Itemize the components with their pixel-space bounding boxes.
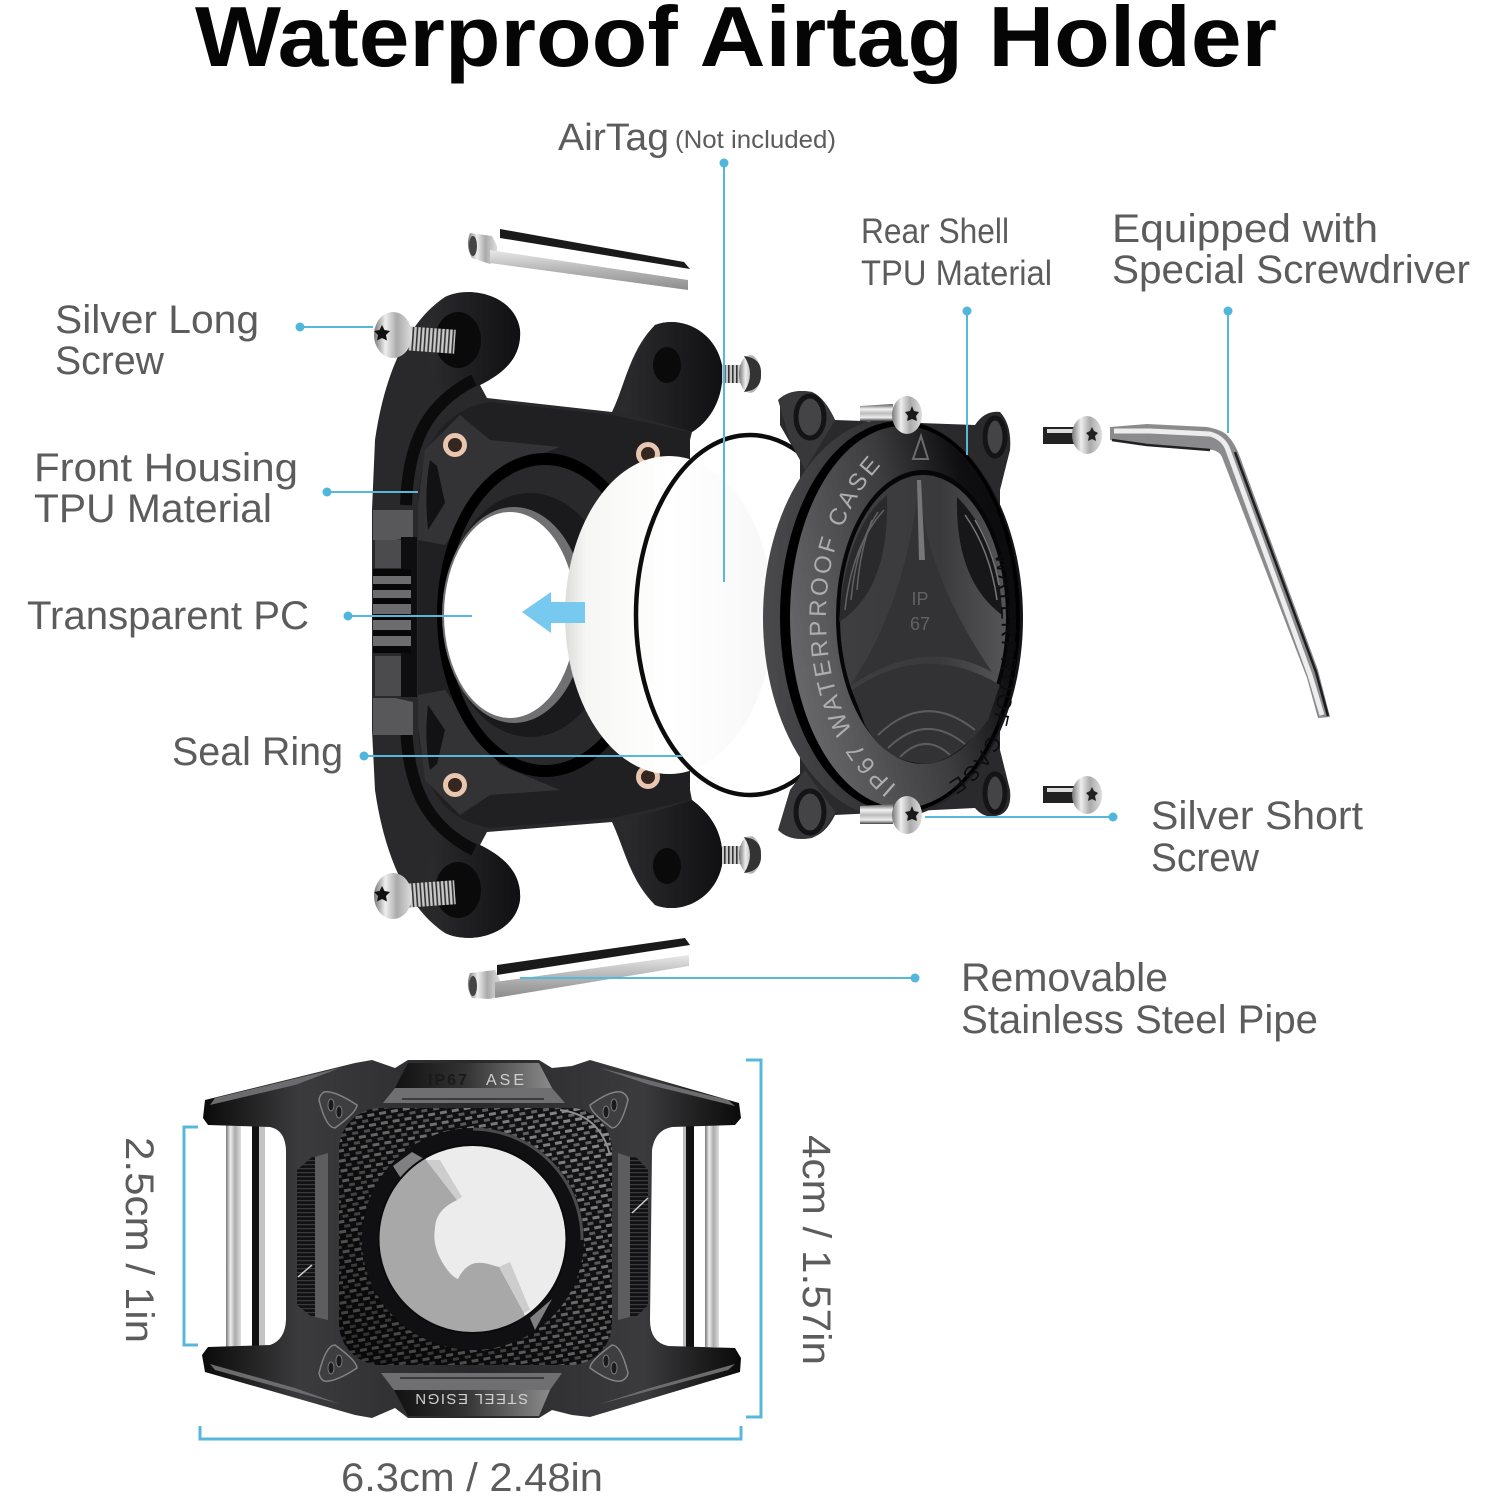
exploded view illustration <box>372 229 1330 999</box>
callout: airtag <box>720 158 728 582</box>
dimension: width <box>200 1426 741 1497</box>
dimension: height <box>746 1060 838 1417</box>
black gutter <box>406 380 474 850</box>
label: rear shell: TPU Material <box>861 254 1052 293</box>
label: seal ring: Seal Ring <box>172 730 343 774</box>
airtag window ring <box>362 1128 584 1350</box>
side vents <box>297 1153 648 1320</box>
callout: rear shell <box>962 306 972 455</box>
label: airtag <box>558 117 836 159</box>
label: front housing: TPU Material <box>34 487 272 531</box>
copper screw holes <box>443 433 660 797</box>
left screws <box>374 312 456 919</box>
inner cap <box>836 470 1010 764</box>
top right lobe <box>620 322 722 432</box>
corner buttons <box>319 1092 628 1381</box>
ip67 mark: 67 <box>910 614 930 634</box>
ip67 mark: IP <box>911 589 929 609</box>
callout: screwdriver <box>1224 306 1232 433</box>
engraved text: IP67 WATERPROOF CASE <box>809 456 896 797</box>
label: front housing <box>34 446 298 531</box>
label: airtag: (Not included) <box>675 126 836 154</box>
screwdriver <box>1110 424 1330 718</box>
airtag with apple logo <box>380 1146 566 1332</box>
bottom tab: STEEL ESIGN <box>414 1390 528 1407</box>
bottom steel pipe <box>468 938 690 999</box>
lens opening <box>437 453 653 777</box>
side grip <box>373 510 413 540</box>
label: stainless steel pipe: Removable <box>961 956 1168 1000</box>
bottom tab <box>381 1373 562 1416</box>
inner plate <box>418 402 690 828</box>
ip67 mark <box>910 589 930 634</box>
steel pins <box>226 1125 719 1347</box>
top tab <box>383 1063 565 1103</box>
ridged sectors <box>839 495 887 622</box>
front housing <box>372 292 722 938</box>
label: airtag: AirTag <box>558 117 669 159</box>
rear shell <box>763 391 1023 839</box>
label: silver long screw: Silver Long <box>55 298 259 342</box>
right housing screws <box>722 355 761 874</box>
top steel pipe <box>468 229 690 290</box>
dimension: height: 4cm / 1.57in <box>794 1135 838 1365</box>
label: front housing: Front Housing <box>34 446 298 490</box>
seal ring <box>636 435 864 795</box>
callout: transparent pc <box>344 612 472 620</box>
centre tri-star <box>850 478 992 686</box>
engraved text: right side: WATERPROOF CASE <box>949 557 1016 794</box>
callout: front housing <box>322 488 418 496</box>
callout: long screw <box>296 322 373 332</box>
lobe holes <box>435 312 481 368</box>
callout: seal ring <box>360 752 682 760</box>
label: silver short screw: Screw <box>1151 836 1259 880</box>
top tab: IP67 <box>428 1072 469 1089</box>
dimension: pin width <box>117 1127 198 1345</box>
arm highlights <box>210 1068 735 1404</box>
callout: short screw <box>925 812 1118 822</box>
top tab: ASE <box>486 1072 527 1089</box>
shell ears <box>780 391 1010 839</box>
label: stainless steel pipe <box>961 956 1318 1042</box>
ear bosses <box>796 396 1005 833</box>
airtag dome <box>565 456 773 774</box>
callout: steel pipe <box>520 974 920 982</box>
spare short screws <box>1043 416 1102 814</box>
bottom right lobe <box>620 800 722 908</box>
label: screwdriver <box>1112 207 1470 292</box>
top left lobe <box>425 292 520 400</box>
carbon fibre panel <box>339 1108 612 1365</box>
label: silver short screw: Silver Short <box>1151 794 1363 838</box>
label: rear shell <box>861 212 1052 293</box>
bottom left lobe <box>425 830 520 938</box>
label: silver short screw <box>1151 794 1363 880</box>
alignment triangle <box>913 436 928 459</box>
label: stainless steel pipe: Stainless Steel Pipe <box>961 998 1318 1042</box>
arrow: insertion direction <box>522 592 585 633</box>
rear shell screws <box>860 396 922 834</box>
dimension: pin width: 2.5cm / 1in <box>117 1137 161 1343</box>
callout lines <box>296 158 1232 982</box>
label: silver long screw: Screw <box>55 339 164 383</box>
label: transparent pc: Transparent PC <box>27 594 309 638</box>
assembled holder illustration <box>202 1060 741 1418</box>
holder body <box>202 1060 741 1418</box>
label: rear shell: Rear Shell <box>861 212 1009 251</box>
label: screwdriver: Special Screwdriver <box>1112 248 1470 292</box>
label: screwdriver: Equipped with <box>1112 207 1378 251</box>
label: silver long screw <box>55 298 259 383</box>
